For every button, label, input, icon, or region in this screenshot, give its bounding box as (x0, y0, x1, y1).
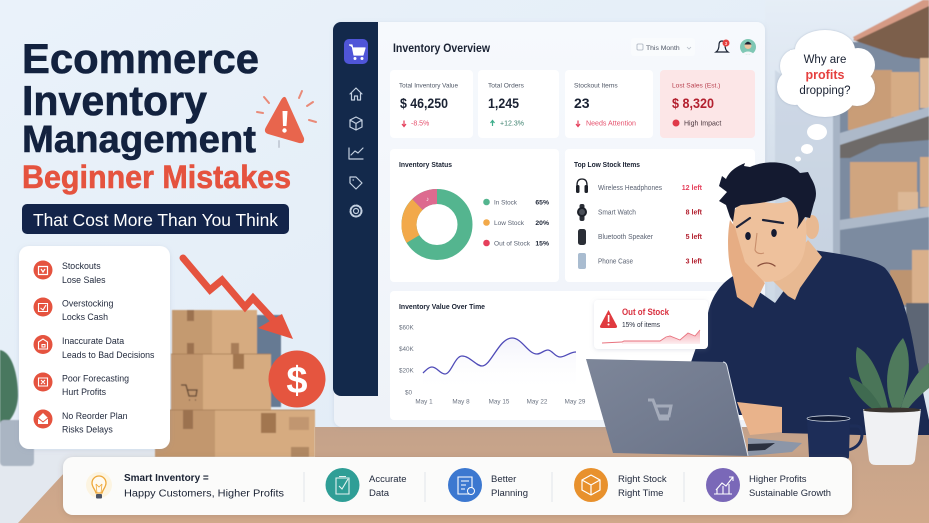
right stock right time: Right Time (618, 488, 663, 499)
date picker (631, 38, 695, 56)
legend: 15% (535, 240, 549, 248)
logo (344, 39, 368, 64)
popup: out of stock: Out of Stock (622, 307, 670, 317)
icon: light bulb (86, 472, 112, 498)
panel: inventory value line chart (390, 291, 755, 420)
neck (772, 240, 822, 300)
KPI: total inventory value: Total Inventory Value (399, 82, 458, 90)
poor forecasting: Hurt Profits (62, 387, 107, 397)
warehouse shelves (765, 0, 929, 383)
popup: out of stock (594, 300, 708, 349)
overstocking: Locks Cash (62, 312, 108, 322)
coffee mug (807, 416, 862, 459)
accurate data: Data (369, 488, 390, 499)
donut chart (409, 196, 465, 252)
laptop (586, 359, 802, 456)
panel: inventory value line chart: $40K (399, 346, 415, 353)
thought bubble (777, 30, 875, 162)
facial features (737, 218, 783, 266)
arrow: falling trend (183, 258, 293, 339)
accurate data: Accurate (369, 474, 406, 485)
KPI: stockout items (565, 70, 653, 138)
KPI: total orders (478, 70, 559, 138)
panel: dashboard (333, 22, 765, 427)
panel: inventory value line chart: May 29 (565, 398, 586, 406)
potted plant (849, 338, 929, 465)
KPI: stockout items: Stockout Items (574, 82, 618, 90)
panel: inventory value line chart: May 22 (527, 398, 548, 406)
cardboard boxes (155, 310, 315, 457)
desk (18, 427, 929, 523)
panel: inventory status (390, 149, 559, 282)
higher profits (706, 468, 831, 502)
KPI: stockout items: 23 (574, 95, 590, 111)
legend: 65% (535, 200, 549, 206)
panel: top low stock items: 3 left (686, 258, 703, 266)
popup: out of stock: 15% of items (622, 322, 660, 329)
no reorder plan: No Reorder Plan (62, 411, 128, 421)
KPI: stockout items: Needs Attention (586, 120, 636, 128)
product icons (576, 179, 588, 269)
legend: In Stock (494, 200, 518, 206)
KPI: total orders: Total Orders (488, 82, 525, 90)
right stock right time: Right Stock (618, 474, 667, 485)
icon: dollar coin (268, 350, 326, 408)
KPI: lost sales: High Impact (684, 120, 721, 128)
panel: top low stock items (565, 149, 755, 282)
KPI: total inventory value (390, 70, 473, 138)
subtitle pill (22, 204, 289, 234)
legend: Low Stock (494, 220, 525, 227)
hand on keyboard (737, 402, 782, 435)
notification bell: 3 (725, 41, 728, 46)
date picker: This Month (646, 45, 680, 52)
panel: inventory value line chart: May 15 (489, 398, 510, 406)
panel: inventory value line chart: $0 (405, 390, 413, 396)
ear (805, 215, 819, 239)
user avatar (740, 39, 756, 55)
panel: inventory value line chart: $20K (399, 368, 415, 374)
panel: top low stock items: Top Low Stock Items (574, 160, 640, 169)
cart logo (648, 400, 671, 419)
sweater (690, 250, 929, 435)
better planning (448, 468, 528, 502)
panel: bottom takeaway bar (63, 457, 852, 515)
title (22, 35, 291, 195)
overstocking: Overstocking (62, 298, 113, 308)
panel: bottom takeaway bar: Happy Customers, Higher Profits (124, 488, 284, 500)
no reorder plan (34, 410, 128, 434)
dashboard title: Inventory Overview (393, 43, 490, 55)
panel: inventory value line chart: $60K (399, 324, 415, 332)
panel: inventory status: Inventory Status (399, 160, 452, 169)
stockouts: Stockouts (62, 261, 101, 271)
title: Management (22, 119, 256, 161)
hair (719, 162, 816, 229)
panel: top low stock items: Phone Case (598, 258, 633, 266)
accurate data (326, 468, 406, 502)
panel: top low stock items: 8 left (686, 210, 703, 216)
panel: top low stock items: 5 left (686, 234, 703, 241)
KPI: lost sales: $ 8,320 (672, 95, 714, 111)
donut chart: ♪ (426, 197, 429, 203)
sidebar nav icons (349, 88, 363, 216)
stockouts (34, 260, 106, 285)
legend (483, 199, 549, 248)
KPI: total inventory value: $ 46,250 (400, 95, 448, 111)
overstocking (34, 298, 113, 322)
panel: top low stock items: Wireless Headphones (598, 185, 662, 192)
sidebar (333, 22, 378, 396)
face (733, 198, 806, 282)
KPI: total orders: +12.3% (500, 120, 524, 128)
notification bell (716, 40, 730, 52)
poor forecasting: Poor Forecasting (62, 374, 129, 384)
title: Ecommerce (22, 35, 259, 82)
higher profits: Higher Profits (749, 474, 807, 485)
title: Inventory (22, 77, 208, 124)
thought bubble: Why are (804, 54, 846, 66)
takeaway message: Smart Inventory = (124, 473, 209, 484)
thought bubble: dropping? (799, 85, 851, 97)
stockouts: Lose Sales (62, 275, 106, 285)
no reorder plan: Risks Delays (62, 424, 113, 434)
better planning: Planning (491, 488, 528, 499)
icon: warning triangle (257, 91, 316, 147)
panel: inventory value line chart: Inventory Value Over Time (399, 302, 485, 311)
KPI: total orders: 1,245 (488, 95, 519, 111)
KPI: total inventory value: -8.5% (411, 120, 429, 128)
panel: inventory value line chart: May 8 (452, 398, 470, 406)
panel: mistakes list (19, 246, 170, 449)
hand on cheek (728, 220, 765, 308)
title: Beginner Mistakes (22, 159, 291, 195)
thought bubble: profits (806, 68, 844, 82)
plant left (0, 350, 34, 466)
inaccurate data (34, 335, 155, 360)
KPI: lost sales: Lost Sales (Est.) (672, 82, 720, 90)
inaccurate data: Inaccurate Data (62, 336, 124, 346)
legend: Out of Stock (494, 240, 531, 248)
panel: top low stock items: 12 left (682, 185, 703, 192)
person (690, 162, 929, 435)
poor forecasting (34, 372, 129, 397)
panel: inventory value line chart: May 1 (415, 398, 433, 406)
legend: 20% (535, 220, 549, 227)
higher profits: Sustainable Growth (749, 488, 831, 499)
inaccurate data: Leads to Bad Decisions (62, 350, 155, 360)
icon: dollar coin: $ (286, 360, 308, 402)
better planning: Better (491, 474, 516, 485)
right stock right time (574, 468, 667, 502)
KPI: lost sales (660, 70, 755, 138)
subtitle pill: That Cost More Than You Think (33, 210, 278, 230)
panel: top low stock items: Bluetooth Speaker (598, 234, 654, 241)
panel: top low stock items: Smart Watch (598, 210, 636, 216)
